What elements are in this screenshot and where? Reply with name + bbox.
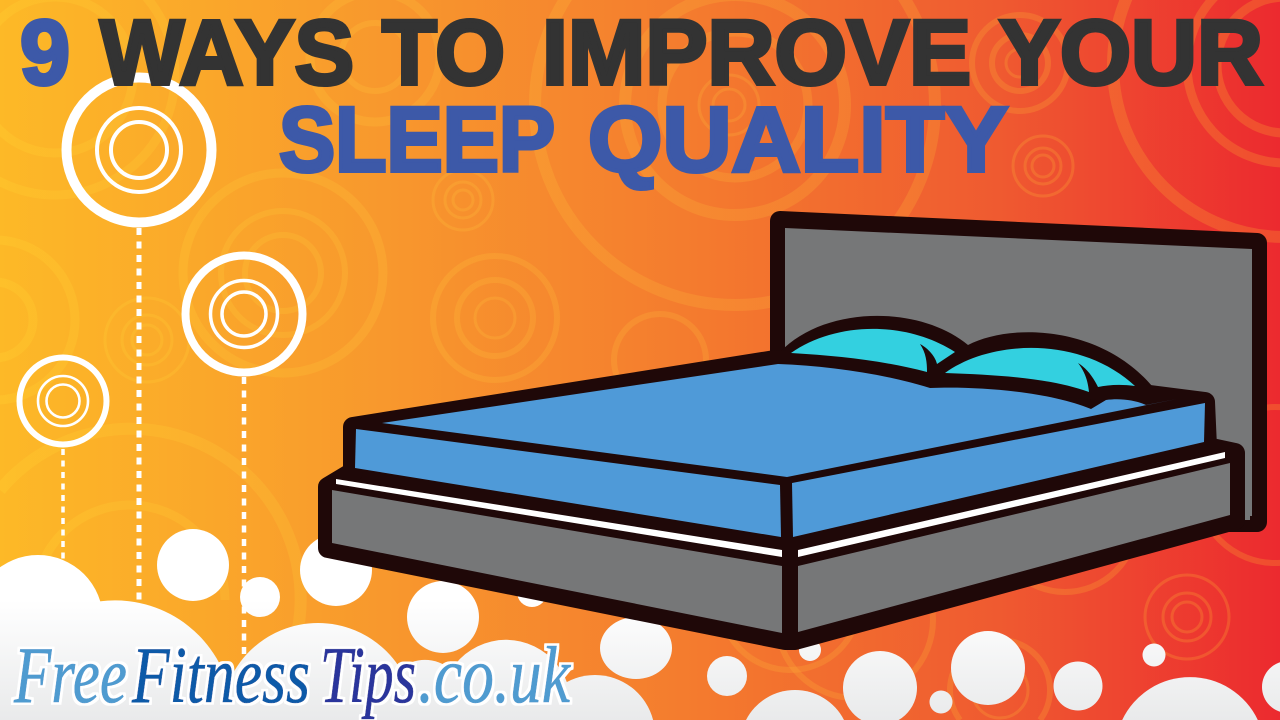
pillow fills — [791, 329, 1135, 392]
icon: medium target circle with dotted stem — [186, 256, 302, 660]
wordmark: FreeFitnessTips.co.uk: Free — [13, 632, 127, 720]
white trim left — [336, 479, 782, 557]
mattress and base silhouette — [328, 360, 1235, 640]
title: line one: 9 — [20, 2, 70, 104]
title: line two — [279, 89, 1008, 191]
wordmark: FreeFitnessTips.co.uk — [13, 632, 571, 720]
headboard — [780, 221, 1257, 522]
wordmark: FreeFitnessTips.co.uk: Fitness — [131, 632, 310, 720]
icon: small target circle with dotted stem — [20, 358, 106, 560]
mattress left face — [355, 429, 781, 537]
base left face — [332, 490, 782, 633]
mattress right face — [792, 403, 1205, 537]
title: line two: SLEEP — [279, 89, 555, 191]
title: line one — [20, 2, 1263, 104]
wordmark: FreeFitnessTips.co.uk: .co.uk — [418, 632, 571, 720]
pillow outlines — [780, 316, 1152, 412]
title: line one: WAYS — [100, 2, 354, 104]
title: line one: YOUR — [999, 2, 1263, 104]
title: line one: IMPROVE — [542, 2, 971, 104]
title: line two: QUALITY — [588, 89, 1008, 191]
mattress top — [382, 364, 1177, 477]
white trim right — [798, 452, 1225, 557]
wordmark: FreeFitnessTips.co.uk: Tips — [320, 632, 416, 720]
title: line one: TO — [382, 2, 505, 104]
illustration: bed — [328, 221, 1257, 640]
icon: large target circle with dotted stem — [66, 78, 212, 600]
cloud bank and bubbles — [0, 529, 1280, 720]
base right face — [798, 463, 1230, 632]
